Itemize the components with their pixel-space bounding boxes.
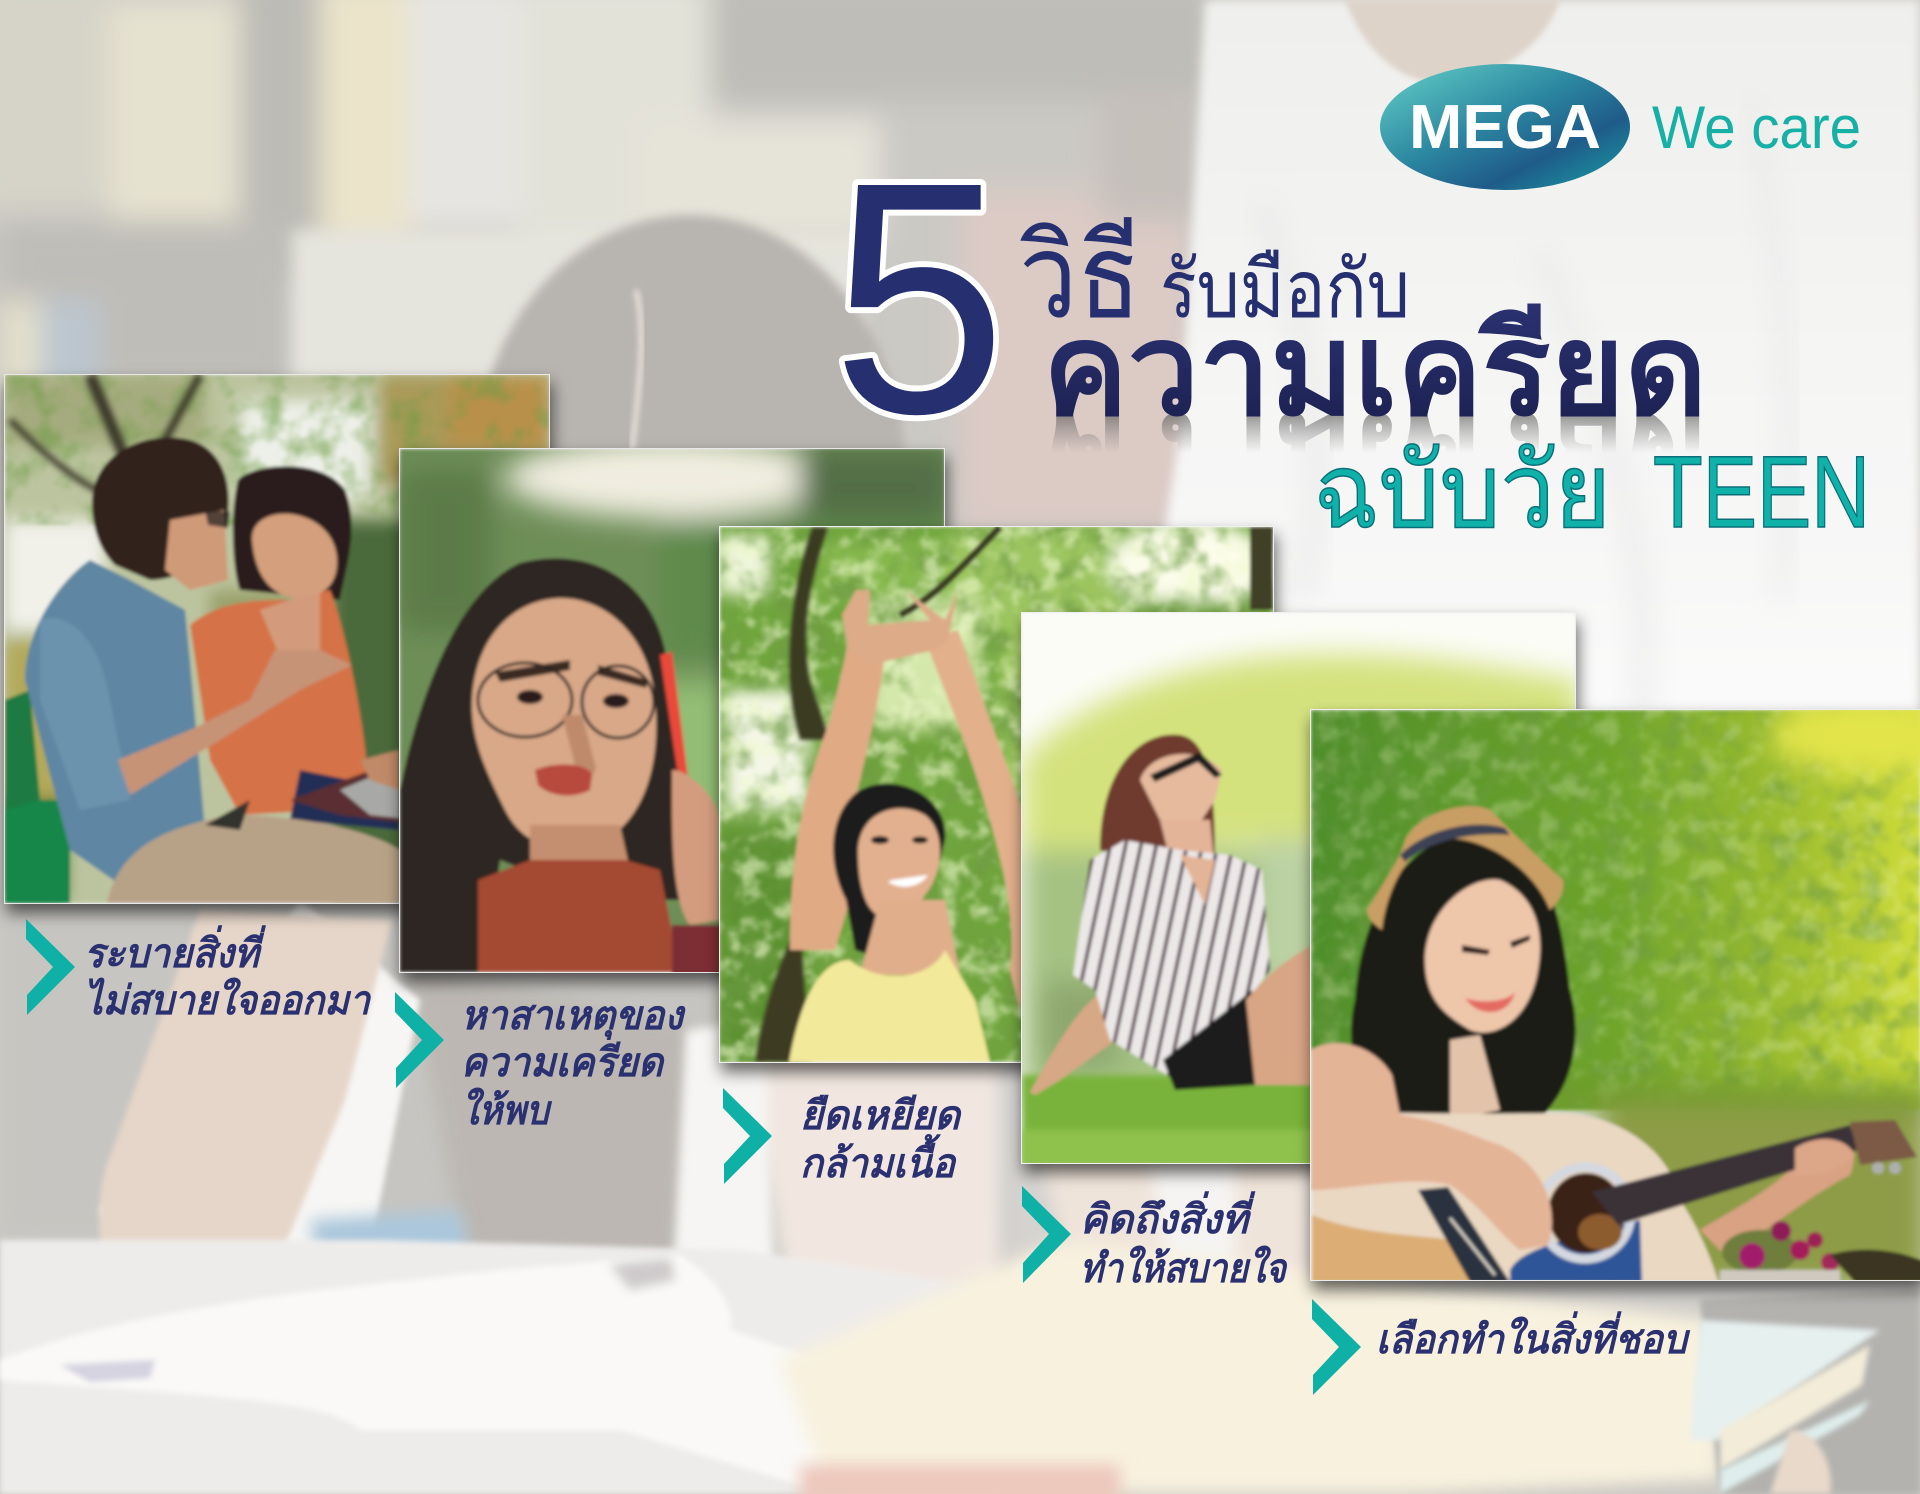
stretching arms [790, 640, 885, 950]
title [832, 115, 1870, 550]
title reflection: ความเครียด [1043, 387, 1707, 530]
caption text 2: หาสาเหตุของ [461, 994, 686, 1041]
photo 1: couple talking on a bench [4, 374, 550, 904]
caption text 4: คิดถึงสิ่งที่ [1080, 1191, 1256, 1242]
photo 2: girl with glasses thinking [399, 438, 950, 975]
face [472, 598, 656, 849]
caption 5 [1312, 1299, 1690, 1395]
photo 3: woman stretching arms under trees [719, 520, 1280, 1063]
hair and hat [1351, 832, 1576, 1125]
photo 4: woman breathing on the grass [1021, 612, 1582, 1165]
title: TEEN: TEEN [1653, 435, 1870, 549]
title: to cope with: รับมือกับ [1160, 245, 1410, 334]
right hand and lawn arm [1699, 1156, 1856, 1252]
guitar body [1312, 1110, 1718, 1282]
chevron 1 [26, 919, 75, 1015]
logo oval [1380, 64, 1630, 190]
chevron 5 [1312, 1299, 1361, 1395]
head and top [833, 784, 945, 960]
caption text 4: ทำให้สบายใจ [1080, 1245, 1288, 1291]
caption text 2: ความเครียด [461, 1041, 665, 1085]
caption text 3: กล้ามเนื้อ [800, 1133, 957, 1186]
caption text 1: ระบายสิ่งที่ [84, 925, 267, 976]
sweater [478, 860, 680, 972]
woman in orange top [190, 466, 399, 830]
photo 5: girl playing guitar [1310, 695, 1920, 1290]
caption text 1: ไม่สบายใจออกมา [84, 977, 371, 1023]
hair [400, 558, 682, 972]
flowers [1720, 1221, 1840, 1282]
caption 1 [26, 919, 371, 1023]
caption 3 [723, 1088, 962, 1186]
logo: MEGA We care [1380, 64, 1861, 190]
chevron 3 [723, 1088, 772, 1184]
title: stress: ความเครียด [1043, 299, 1707, 442]
title numeral 5: 5 [832, 115, 1006, 483]
pencil and hand [657, 650, 690, 776]
logo wordmark: MEGA [1409, 93, 1601, 162]
chevron 2 [395, 992, 444, 1088]
title: 5 ways: วิธี [1019, 211, 1141, 343]
tagline: We care [1652, 94, 1861, 161]
caption 4 [1022, 1186, 1288, 1291]
caption 2 [395, 992, 686, 1133]
man in blue shirt [25, 438, 400, 903]
caption text 2: ให้พบ [461, 1087, 552, 1133]
caption text 5: เลือกทำในสิ่งที่ชอบ [1376, 1311, 1690, 1362]
left arm [1311, 1043, 1552, 1250]
fretboard and headstock [1592, 1125, 1858, 1225]
caption text 3: ยืดเหยียด [800, 1094, 962, 1138]
chevron 4 [1022, 1186, 1071, 1283]
title: teen edition thai: ฉบับวัย [1313, 434, 1611, 550]
